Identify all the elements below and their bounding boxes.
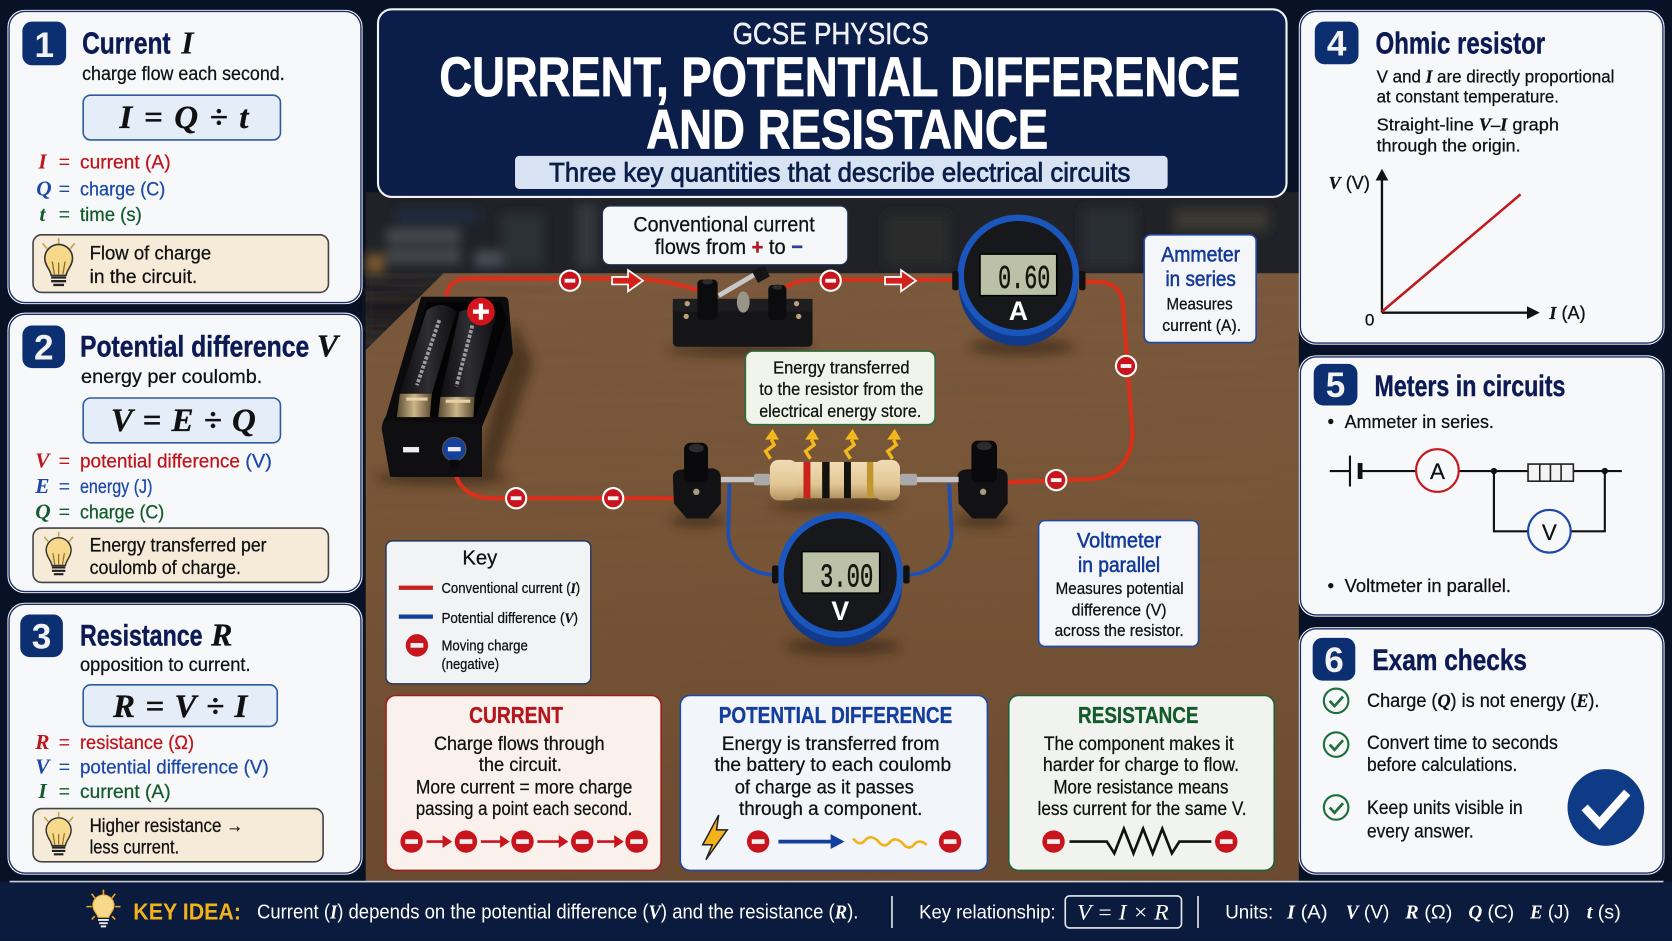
callout: voltmeter in parallel: difference (V) — [1072, 601, 1167, 620]
hint: Energy transferred per — [90, 536, 267, 557]
heading symbol: R — [210, 617, 232, 652]
panel 4: ohmic resistor — [1299, 10, 1665, 345]
variables: = — [59, 756, 70, 778]
title panel — [378, 9, 1287, 197]
formula: R = V ÷ I — [112, 689, 249, 725]
switch — [673, 266, 813, 347]
hint: Flow of charge — [90, 243, 211, 264]
heading symbol: V — [317, 328, 341, 363]
key: Potential difference (V) — [441, 610, 578, 627]
badge 5: 5 — [1326, 366, 1345, 405]
card: potential difference: Energy is transferred from — [722, 734, 939, 755]
panel 2: potential difference — [7, 313, 363, 593]
formula: V = E ÷ Q — [111, 403, 256, 439]
icon: large tick — [1568, 769, 1644, 846]
body text: Straight-line V–I graph — [1377, 114, 1559, 134]
variables — [34, 730, 269, 803]
callout: ammeter in series: current (A). — [1162, 316, 1241, 335]
circuit photo — [376, 218, 1137, 655]
subtitle: Three key quantities that describe electrical circuits — [549, 158, 1130, 188]
wires: conventional current — [447, 279, 1132, 498]
formula: I = Q ÷ t — [118, 100, 249, 136]
description: opposition to current. — [80, 654, 251, 676]
units: Units: — [1225, 901, 1273, 923]
key: Conventional current (I) — [441, 580, 580, 597]
card: current — [386, 695, 661, 870]
card: potential difference: of charge as it passes — [735, 778, 914, 799]
card: resistance: More resistance means — [1054, 778, 1228, 799]
card: resistance: The component makes it — [1044, 734, 1234, 755]
subject label: GCSE PHYSICS — [733, 16, 929, 51]
voltmeter: V — [831, 596, 849, 626]
icon: bulb — [86, 890, 120, 926]
variables: E — [34, 474, 49, 498]
terminals — [673, 441, 1008, 518]
badge 6: 6 — [1324, 641, 1344, 680]
battery positive terminal — [467, 298, 495, 325]
ammeter — [952, 218, 1086, 346]
hint — [33, 528, 328, 582]
variables: = — [59, 501, 70, 523]
callout: ammeter in series: Ammeter — [1161, 243, 1240, 267]
resistor strip — [1042, 829, 1237, 853]
key: (negative) — [441, 656, 499, 673]
badge 4: 4 — [1327, 25, 1347, 64]
ammeter: A — [1009, 296, 1028, 326]
variables — [36, 150, 171, 226]
variables: time (s) — [80, 204, 142, 226]
variables: current (A) — [80, 152, 171, 174]
key: Key — [462, 547, 498, 569]
check item 3: every answer. — [1367, 821, 1474, 842]
variables: current (A) — [80, 781, 171, 803]
variables: energy (J) — [80, 476, 152, 498]
voltmeter — [772, 515, 910, 646]
resistor — [721, 460, 959, 500]
V-I graph — [1329, 169, 1586, 329]
panel 3: resistance — [7, 603, 363, 875]
card: current: the circuit. — [479, 755, 562, 776]
description: charge flow each second. — [82, 63, 285, 85]
badge 1: 1 — [34, 26, 54, 65]
hint: in the circuit. — [90, 267, 197, 288]
card: resistance — [1009, 695, 1274, 870]
hint — [33, 235, 328, 292]
variables: I — [37, 150, 47, 174]
main title: AND RESISTANCE — [646, 98, 1048, 160]
variables: (V) — [245, 450, 272, 472]
key: Moving charge — [441, 638, 528, 655]
callout: ammeter in series: Measures — [1167, 294, 1233, 313]
hint — [33, 809, 323, 862]
callout: energy transferred: to the resistor from the — [759, 379, 923, 399]
callout: energy transferred: electrical energy store. — [759, 401, 921, 421]
V-I graph: 0 — [1365, 310, 1374, 329]
variables: = — [59, 732, 70, 754]
callout: voltmeter in parallel: in parallel — [1078, 553, 1160, 577]
body text: at constant temperature. — [1377, 87, 1559, 107]
body text: through the origin. — [1377, 136, 1521, 156]
energy strip — [703, 815, 961, 860]
bullet: ammeter: Ammeter in series. — [1345, 412, 1494, 432]
variables — [34, 448, 272, 523]
variables: potential difference — [80, 450, 240, 472]
heading: Exam checks — [1372, 644, 1527, 677]
heading: Meters in circuits — [1374, 370, 1565, 403]
check item 3: Keep units visible in — [1367, 798, 1523, 819]
badge 2: 2 — [34, 329, 54, 368]
badge 3 — [20, 614, 63, 657]
check item 1: Charge (Q) is not energy (E). — [1367, 691, 1599, 712]
key relationship: V = I × R — [1077, 899, 1169, 924]
callout: conventional current: flows from + to − — [655, 235, 803, 259]
V-I graph: I (A) — [1548, 303, 1586, 323]
heading symbol: I — [180, 26, 195, 61]
variables: Q — [36, 176, 52, 200]
moving charges — [505, 269, 1137, 509]
body text: V and I are directly proportional — [1377, 66, 1614, 86]
current direction arrows — [612, 270, 916, 291]
variables: = — [59, 204, 70, 226]
variables: Q — [35, 499, 51, 523]
card: potential difference: the battery to each coulomb — [714, 755, 951, 776]
key idea statement: Current (I) depends on the potential difference (V) and the resistance (R). — [257, 901, 858, 923]
hint: Higher resistance → — [90, 816, 243, 837]
voltmeter: 3.00 — [820, 559, 873, 597]
callout: voltmeter in parallel: across the resistor. — [1055, 621, 1184, 640]
heat arrows — [765, 429, 901, 459]
card: resistance: harder for charge to flow. — [1043, 755, 1239, 776]
callout: energy transferred — [745, 351, 935, 425]
formula — [83, 398, 280, 443]
callout: voltmeter in parallel — [1039, 521, 1199, 646]
units: Q (C) — [1468, 901, 1514, 923]
variables: potential difference (V) — [80, 756, 269, 778]
badge 1 — [22, 22, 66, 65]
variables: charge (C) — [80, 178, 165, 200]
variables: = — [59, 178, 70, 200]
variables: t — [39, 202, 46, 226]
variables: = — [59, 781, 70, 803]
description: energy per coulomb. — [81, 366, 262, 388]
key — [386, 541, 591, 684]
callout: voltmeter in parallel: Measures potential — [1056, 579, 1184, 598]
main title — [439, 46, 1240, 160]
callout: ammeter in series — [1144, 235, 1256, 343]
units: V (V) — [1346, 901, 1389, 923]
check item 2: Convert time to seconds — [1367, 733, 1558, 754]
units: t (s) — [1587, 901, 1621, 923]
card: potential difference: POTENTIAL DIFFERENCE — [719, 702, 952, 728]
callout: conventional current: Conventional current — [633, 213, 815, 237]
wires: potential difference — [728, 483, 952, 575]
variables: V — [35, 754, 51, 778]
badge 6 — [1313, 638, 1355, 681]
variables: charge (C) — [80, 501, 164, 523]
charge flow strip — [400, 830, 648, 853]
variables: = — [59, 476, 70, 498]
key idea label: KEY IDEA: — [133, 898, 241, 924]
hint: coulomb of charge. — [90, 558, 241, 579]
card: current: More current = more charge — [416, 778, 632, 799]
units: E (J) — [1529, 901, 1570, 923]
battery holder — [382, 297, 513, 477]
battery negative terminal — [403, 437, 466, 468]
callout: voltmeter in parallel: Voltmeter — [1077, 528, 1161, 552]
panel 1: current — [7, 10, 363, 304]
ammeter: 0.60 — [998, 260, 1050, 298]
shadows — [376, 320, 1075, 655]
bullet: voltmeter: Voltmeter in parallel. — [1345, 576, 1511, 596]
callout: energy transferred: Energy transferred — [773, 357, 910, 377]
check item 2 — [1324, 732, 1558, 776]
badge 5 — [1314, 364, 1357, 405]
units: R (Ω) — [1404, 901, 1452, 923]
badge 3: 3 — [32, 618, 51, 657]
check item 3 — [1324, 795, 1523, 842]
variables: = — [59, 152, 70, 174]
units — [1225, 901, 1621, 923]
V-I graph: V (V) — [1329, 173, 1370, 193]
circuit diagram: A — [1430, 459, 1445, 484]
variables: resistance (Ω) — [80, 732, 194, 754]
hint: less current. — [90, 837, 179, 858]
card: potential difference — [680, 695, 987, 870]
card: potential difference: through a component. — [739, 799, 922, 820]
circuit diagram — [1330, 449, 1622, 553]
units: I (A) — [1286, 901, 1328, 923]
heading: Resistance — [80, 619, 203, 652]
card: current: passing a point each second. — [416, 799, 632, 820]
badge 2 — [22, 325, 65, 368]
variables: = — [59, 450, 70, 472]
key relationship: Key relationship: — [919, 901, 1056, 923]
body text — [1377, 66, 1614, 156]
card: resistance: less current for the same V. — [1038, 799, 1247, 820]
callout: conventional current — [602, 206, 848, 265]
formula — [83, 685, 277, 726]
heading: Current — [82, 26, 171, 61]
heading: Ohmic resistor — [1376, 26, 1545, 61]
card: resistance: RESISTANCE — [1078, 702, 1199, 728]
variables: R — [34, 730, 49, 754]
variables: I — [37, 779, 47, 803]
panel 6: exam checks — [1299, 627, 1665, 875]
formula — [83, 95, 280, 140]
card: current: CURRENT — [469, 702, 564, 728]
key idea bar — [0, 882, 1672, 941]
callout: ammeter in series: in series — [1165, 267, 1236, 291]
circuit diagram: V — [1542, 520, 1557, 545]
variables: V — [35, 448, 51, 472]
main title: CURRENT, POTENTIAL DIFFERENCE — [439, 46, 1240, 108]
card: current: Charge flows through — [434, 734, 605, 755]
panel 5: meters in circuits — [1299, 355, 1665, 617]
heading: Potential difference — [80, 330, 309, 363]
badge 4 — [1315, 22, 1358, 64]
key relationship — [919, 896, 1181, 928]
check item 2: before calculations. — [1367, 755, 1517, 776]
batteries — [397, 305, 497, 417]
